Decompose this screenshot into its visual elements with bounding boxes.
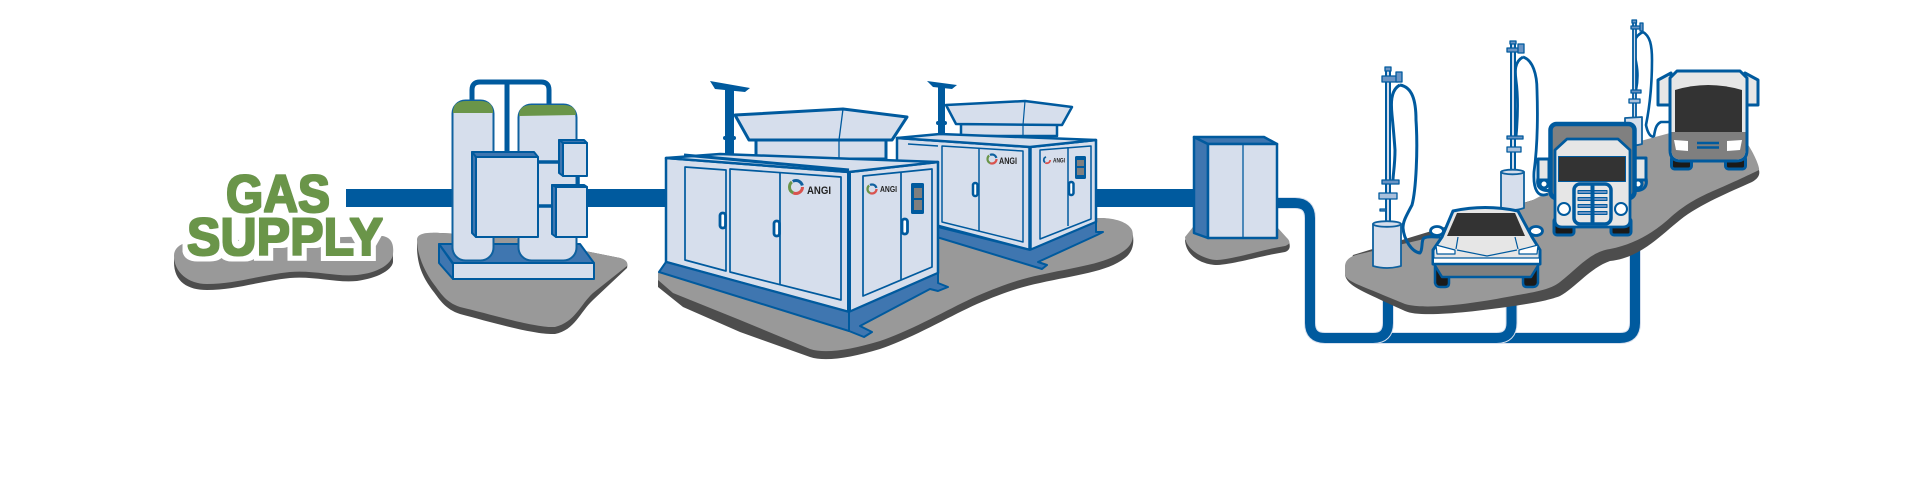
truck cab — [1555, 139, 1630, 227]
car windshield — [1447, 213, 1525, 236]
dryer ground — [417, 233, 627, 334]
rear exhaust stack — [927, 81, 957, 136]
truck windshield — [1558, 156, 1626, 182]
cabinet ground — [1185, 227, 1290, 265]
bus windshield — [1675, 85, 1742, 132]
dispenser 2 — [1501, 41, 1548, 210]
vehicle: bus — [1658, 71, 1758, 169]
rear cabinet — [897, 134, 1096, 250]
bus mirrors — [1658, 73, 1758, 105]
front logo: ANGI end — [868, 184, 897, 194]
central box — [472, 152, 538, 237]
tank piping — [472, 82, 549, 154]
car bumper and lower body — [1434, 258, 1539, 264]
panel: storage cabinet — [1185, 137, 1290, 265]
title: gas supply — [187, 165, 383, 267]
front logo: ANGI side — [790, 180, 831, 197]
dispenser 3 — [1625, 20, 1672, 146]
bus body — [1670, 71, 1747, 161]
rear logo: ANGI side — [988, 154, 1017, 166]
main gas pipeline — [346, 189, 1196, 207]
vehicle: car — [1430, 208, 1542, 287]
truck cargo box — [1550, 124, 1634, 198]
bus headlights and grille — [1674, 140, 1742, 151]
front handles and meter — [720, 183, 924, 236]
lower small box — [552, 185, 587, 237]
panel: compressor front — [659, 81, 948, 337]
bus wheels — [1672, 156, 1746, 169]
upper small box — [559, 140, 587, 176]
vehicle: truck — [1538, 124, 1646, 235]
connecting lines — [538, 162, 578, 206]
gas supply ground and label — [174, 165, 393, 290]
right tank — [518, 104, 576, 260]
panel: gas dryer unit — [417, 82, 627, 334]
rear hood — [946, 101, 1072, 136]
cabinet body — [1194, 137, 1277, 238]
front skid — [659, 262, 948, 337]
rear logo: ANGI end — [1044, 157, 1065, 164]
distribution pipe network — [1277, 203, 1635, 338]
truck grille — [1574, 184, 1611, 224]
dispenser 1 — [1373, 67, 1440, 268]
compressor ground — [658, 218, 1133, 359]
car mirrors — [1430, 226, 1542, 236]
front exhaust stack — [710, 81, 750, 158]
front logo: ANGI side: ANGI — [807, 185, 831, 197]
title: gas supply: SUPPLY — [187, 208, 383, 267]
car headlights — [1433, 237, 1540, 258]
front cabinet — [666, 154, 938, 312]
rear handles and meter — [973, 156, 1086, 196]
rear skid — [930, 222, 1103, 269]
rear logo: ANGI side: ANGI — [999, 156, 1017, 166]
skid base — [439, 244, 594, 279]
front logo: ANGI end: ANGI — [880, 185, 897, 194]
left tank — [452, 100, 494, 260]
truck wheels — [1554, 218, 1631, 235]
fueling station ground — [1345, 130, 1759, 314]
car wheels — [1435, 265, 1538, 287]
title: gas supply: GAS — [226, 165, 330, 224]
panel: compressor rear — [897, 81, 1103, 269]
truck side mirrors — [1538, 158, 1646, 190]
truck headlights — [1558, 203, 1627, 215]
front hood — [735, 109, 907, 159]
car body — [1433, 208, 1540, 264]
rear logo: ANGI end: ANGI — [1053, 158, 1065, 164]
